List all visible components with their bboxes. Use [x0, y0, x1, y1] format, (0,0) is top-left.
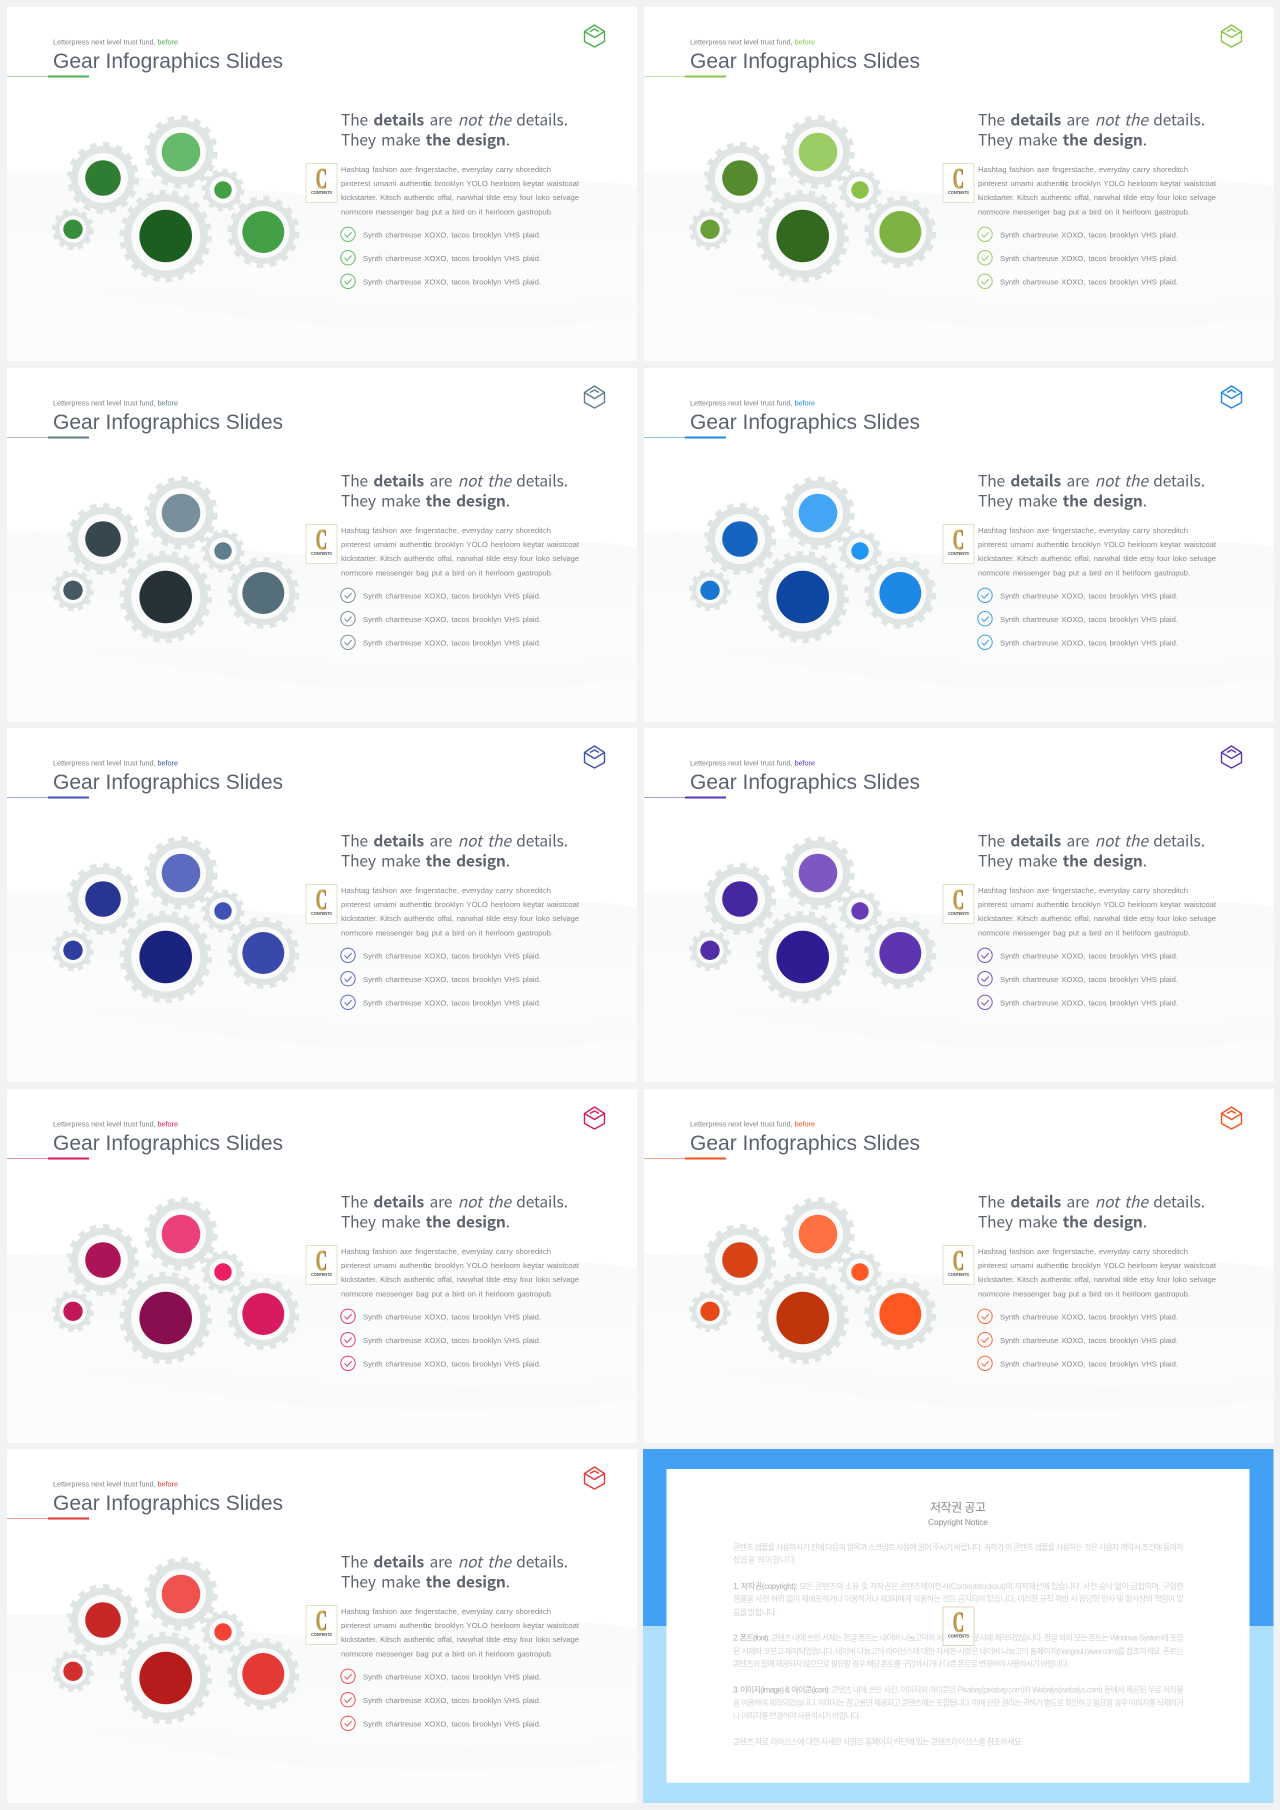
logo badge: C [316, 1606, 327, 1637]
title underline [7, 1157, 89, 1159]
check item: Synth chartreuse XOXO, tacos brooklyn VHS plaid. [363, 1335, 541, 1344]
check item: Synth chartreuse XOXO, tacos brooklyn VHS plaid. [363, 951, 541, 960]
logo badge [306, 884, 337, 924]
headline [978, 469, 1204, 511]
title: Gear Infographics Slides [53, 1492, 283, 1515]
logo badge: C [316, 524, 327, 556]
paragraph: Hashtag fashion axe fingerstache, everyday carry shoreditch [341, 1607, 551, 1616]
logo badge: CONTENTS [948, 911, 969, 916]
gear: tiny left [54, 1292, 92, 1330]
check item: Synth chartreuse XOXO, tacos brooklyn VHS plaid. [1000, 591, 1178, 600]
gear: medium dark [70, 1586, 136, 1654]
check item [977, 251, 1178, 265]
gear: light [147, 478, 215, 546]
notice title: 저작권 공고 [930, 1501, 986, 1515]
logo badge [942, 884, 974, 924]
gear: tiny left [690, 931, 728, 969]
check item [977, 972, 1178, 986]
check item: Synth chartreuse XOXO, tacos brooklyn VHS plaid. [1000, 230, 1178, 239]
headline: They make the design. [978, 489, 1146, 511]
checklist [341, 227, 541, 288]
logo badge [942, 1245, 974, 1284]
check item [977, 611, 1178, 625]
logo badge: CONTENTS [311, 1632, 332, 1637]
paragraph: normcore messenger bag put a bird on it heirloom gastropub. [341, 568, 553, 577]
paragraph: normcore messenger bag put a bird on it heirloom gastropub. [341, 928, 553, 937]
gear: right [866, 559, 933, 626]
check item: Synth chartreuse XOXO, tacos brooklyn VHS plaid. [363, 1672, 541, 1681]
gear: tiny right [840, 1252, 879, 1291]
notice body: 셨음을 의미합니다. [733, 1555, 797, 1565]
title: Gear Infographics Slides [690, 771, 920, 794]
check item [341, 227, 541, 242]
check item [977, 995, 1178, 1010]
logo badge: CONTENTS [948, 1272, 969, 1276]
title underline [644, 1157, 726, 1159]
title: Gear Infographics Slides [690, 50, 920, 73]
gear chart [54, 118, 297, 280]
headline: They make the design. [978, 850, 1146, 872]
gear: right [230, 1640, 297, 1708]
check item: Synth chartreuse XOXO, tacos brooklyn VHS plaid. [1000, 277, 1178, 286]
gear: right [230, 920, 297, 986]
title underline [7, 1518, 89, 1520]
check item: Synth chartreuse XOXO, tacos brooklyn VHS plaid. [363, 230, 541, 239]
subtitle: Letterpress next level trust fund, before [53, 398, 178, 407]
paragraph: Hashtag fashion axe fingerstache, everyday carry shoreditch [341, 1246, 551, 1256]
paragraph [978, 526, 1216, 577]
notice body: 1. 저작권(copyright): 모든 콘텐츠의 소유 및 저작권은 콘텐츠에이전시(Contentstockout)의 저작재산에 있습니다. 사전 승낙 없이 금합하며, 구입한 [733, 1581, 1184, 1591]
check item: Synth chartreuse XOXO, tacos brooklyn VHS plaid. [1000, 254, 1178, 263]
check item: Synth chartreuse XOXO, tacos brooklyn VHS plaid. [363, 1312, 541, 1321]
paragraph [978, 886, 1216, 937]
headline [978, 830, 1204, 872]
logo badge [942, 524, 974, 563]
headline: The details are not the details. [978, 469, 1204, 491]
notice body: 샘플을 사전 허락 없이 재배포하거나 이용하거나 제3자에게 이용하는 것은 금지되어 있습니다. 이러한 규칙 위반 시 응당한 민사 및 형사상의 책임이 있 [733, 1594, 1184, 1604]
gear: right [866, 198, 933, 266]
check item: Synth chartreuse XOXO, tacos brooklyn VHS plaid. [1000, 1335, 1178, 1344]
notice body: 음을 밝힙니다. [733, 1607, 777, 1617]
check item: Synth chartreuse XOXO, tacos brooklyn VHS plaid. [1000, 638, 1178, 647]
paragraph [341, 165, 580, 216]
check item: Synth chartreuse XOXO, tacos brooklyn VHS plaid. [1000, 951, 1178, 960]
logo badge [306, 164, 337, 202]
logo badge: C [952, 885, 964, 916]
panel: light green gear slide [644, 7, 1274, 361]
title: Gear Infographics Slides [53, 771, 283, 794]
check item: Synth chartreuse XOXO, tacos brooklyn VHS plaid. [1000, 614, 1178, 623]
headline [341, 830, 568, 872]
title: Gear Infographics Slides [53, 50, 283, 73]
checklist [341, 588, 541, 649]
headline: The details are not the details. [341, 1190, 568, 1212]
headline: The details are not the details. [341, 1550, 568, 1572]
check item [977, 227, 1178, 242]
paragraph: Hashtag fashion axe fingerstache, everyday carry shoreditch [978, 886, 1188, 895]
title: Gear Infographics Slides [53, 1132, 283, 1154]
paragraph [978, 1246, 1216, 1298]
logo badge: C [952, 164, 964, 195]
gear chart [54, 478, 297, 640]
subtitle: Letterpress next level trust fund, before [53, 38, 178, 46]
gear chart [690, 478, 933, 640]
check item [341, 1309, 541, 1323]
checklist [977, 227, 1178, 288]
paragraph: pinterest umami authentic brooklyn YOLO heirloom keytar waistcoat [978, 1260, 1216, 1270]
headline: The details are not the details. [978, 1190, 1204, 1212]
gear: tiny right [204, 170, 242, 210]
icon: cube [1221, 386, 1241, 408]
gear: large [122, 1274, 209, 1361]
check item [977, 948, 1178, 962]
gear: tiny left [54, 1652, 92, 1690]
gear: right [230, 1280, 297, 1347]
headline: They make the design. [341, 1210, 510, 1232]
gear: tiny right [204, 1612, 242, 1652]
logo badge: CONTENTS [311, 1272, 332, 1276]
paragraph: Hashtag fashion axe fingerstache, everyday carry shoreditch [978, 526, 1188, 534]
check item [341, 251, 541, 265]
checklist [977, 948, 1178, 1010]
check item [341, 1692, 541, 1707]
subtitle: Letterpress next level trust fund, before [690, 758, 814, 768]
checklist [341, 948, 541, 1010]
gear: tiny right [840, 531, 879, 570]
check item [341, 972, 541, 986]
paragraph: kickstarter. Kitsch authentic offal, narwhal tilde etsy four loko selvage [341, 1274, 579, 1284]
paragraph: kickstarter. Kitsch authentic offal, narwhal tilde etsy four loko selvage [341, 914, 579, 923]
panel: blue gear slide [644, 368, 1274, 722]
gear chart [690, 839, 933, 1000]
gear: tiny right [840, 892, 879, 930]
paragraph: normcore messenger bag put a bird on it heirloom gastropub. [341, 1649, 553, 1658]
paragraph: pinterest umami authentic brooklyn YOLO heirloom keytar waistcoat [341, 1260, 580, 1270]
title underline [644, 76, 726, 78]
check item: Synth chartreuse XOXO, tacos brooklyn VHS plaid. [1000, 1312, 1178, 1321]
paragraph: Hashtag fashion axe fingerstache, everyday carry shoreditch [978, 1246, 1188, 1256]
subtitle: Letterpress next level trust fund, before [53, 1480, 178, 1488]
headline [978, 108, 1204, 150]
gear: medium dark [706, 505, 773, 572]
paragraph [341, 526, 580, 577]
paragraph [341, 1607, 580, 1658]
gear: medium dark [706, 1226, 773, 1293]
paragraph: Hashtag fashion axe fingerstache, everyday carry shoreditch [341, 886, 551, 895]
logo badge [943, 1607, 974, 1646]
paragraph: pinterest umami authentic brooklyn YOLO heirloom keytar waistcoat [341, 900, 580, 909]
gear: light [147, 1200, 215, 1268]
check item: Synth chartreuse XOXO, tacos brooklyn VHS plaid. [1000, 975, 1178, 984]
gear: medium dark [70, 144, 136, 212]
notice body: 콘텐츠 자료 라이선스에 대한 자세한 사항은 홈페이지 하단에 있는 콘텐츠라이선스를 참조하세요. [733, 1737, 1023, 1747]
gear: tiny right [204, 531, 242, 570]
check item [977, 274, 1178, 288]
paragraph: pinterest umami authentic brooklyn YOLO heirloom keytar waistcoat [978, 900, 1216, 909]
check item [977, 588, 1178, 602]
gear: light [784, 839, 852, 907]
gear: light [147, 118, 215, 186]
check item [341, 611, 541, 625]
gear: tiny right [204, 1252, 242, 1291]
gear: large [759, 1274, 846, 1361]
gear: light [147, 1560, 215, 1628]
check item: Synth chartreuse XOXO, tacos brooklyn VHS plaid. [1000, 998, 1178, 1007]
headline [978, 1190, 1204, 1232]
gear chart [690, 118, 933, 280]
icon: cube [584, 746, 604, 768]
headline [341, 108, 568, 150]
check item: Synth chartreuse XOXO, tacos brooklyn VHS plaid. [1000, 1359, 1178, 1368]
notice body: 콘텐츠와 함께 제공되지 않으므로 필요할 경우 해당 폰트를 구입하시거나 다른 폰트로 변경하여 사용하시기 바랍니다. [733, 1659, 1069, 1669]
check item: Synth chartreuse XOXO, tacos brooklyn VHS plaid. [363, 1719, 541, 1728]
gear: large [759, 914, 846, 1000]
logo badge: C [952, 524, 964, 556]
paragraph: pinterest umami authentic brooklyn YOLO heirloom keytar waistcoat [341, 540, 580, 548]
gear: light [784, 1200, 852, 1268]
gear: large [122, 1634, 209, 1722]
checklist [341, 1309, 541, 1370]
paragraph: Hashtag fashion axe fingerstache, everyday carry shoreditch [978, 165, 1188, 174]
check item [341, 1716, 541, 1730]
logo badge [306, 1606, 337, 1644]
panel: green gear slide [7, 7, 637, 361]
logo badge: C [952, 1246, 964, 1276]
icon: cube [584, 1106, 604, 1128]
panel: deep purple gear slide [644, 728, 1274, 1082]
subtitle: Letterpress next level trust fund, before [690, 38, 814, 46]
gear: tiny left [54, 571, 92, 609]
headline: They make the design. [341, 489, 510, 511]
gear: right [230, 559, 297, 626]
gear: light [784, 478, 852, 546]
panel: blue-grey gear slide [7, 368, 637, 722]
white card [666, 1469, 1250, 1783]
check item [977, 635, 1178, 649]
gear: large [122, 192, 209, 280]
gear: light [147, 839, 215, 907]
check item [341, 635, 541, 649]
title underline [7, 76, 89, 78]
title underline [644, 796, 726, 798]
headline: They make the design. [978, 1210, 1146, 1232]
check item [977, 1356, 1178, 1370]
paragraph [341, 1246, 580, 1298]
notice body [733, 1542, 1184, 1747]
logo badge: C [316, 1246, 327, 1276]
check item: Synth chartreuse XOXO, tacos brooklyn VHS plaid. [363, 998, 541, 1007]
check item [341, 1356, 541, 1370]
subtitle: Letterpress next level trust fund, before [53, 758, 178, 768]
paragraph: Hashtag fashion axe fingerstache, everyday carry shoreditch [341, 526, 551, 534]
paragraph: normcore messenger bag put a bird on it heirloom gastropub. [978, 568, 1190, 577]
gear: tiny left [690, 1292, 728, 1330]
headline [341, 1190, 568, 1232]
logo badge [942, 164, 974, 202]
gear: tiny left [54, 210, 92, 248]
logo badge: CONTENTS [948, 1634, 969, 1638]
notice subtitle: Copyright Notice [928, 1517, 988, 1527]
title underline [7, 436, 89, 438]
paragraph: kickstarter. Kitsch authentic offal, narwhal tilde etsy four loko selvage [978, 1274, 1216, 1284]
check item: Synth chartreuse XOXO, tacos brooklyn VHS plaid. [363, 254, 541, 263]
paragraph: kickstarter. Kitsch authentic offal, narwhal tilde etsy four loko selvage [341, 554, 579, 562]
logo badge: CONTENTS [948, 550, 969, 556]
headline [341, 1550, 568, 1592]
notice body: 콘텐츠 샘플을 사용하시기 전에 다음의 항목과 스크립트 사용에 읽어 주시기 바랍니다. 귀하가 이 콘텐츠 샘플을 사용하는 것은 사용자 계약서 조건에 동의하 [733, 1542, 1184, 1552]
gear: tiny left [690, 210, 728, 248]
paragraph: pinterest umami authentic brooklyn YOLO heirloom keytar waistcoat [978, 179, 1216, 188]
check item [977, 1309, 1178, 1323]
paragraph [978, 165, 1216, 216]
panel background [643, 1449, 1274, 1803]
notice body: 나 이미지를 변경하여 사용하시기 바랍니다. [733, 1711, 861, 1721]
logo badge: CONTENTS [948, 190, 969, 195]
paragraph: kickstarter. Kitsch authentic offal, narwhal tilde etsy four loko selvage [341, 193, 579, 202]
paragraph: pinterest umami authentic brooklyn YOLO heirloom keytar waistcoat [341, 179, 580, 188]
headline: The details are not the details. [341, 469, 568, 491]
paragraph: normcore messenger bag put a bird on it heirloom gastropub. [978, 928, 1190, 937]
panel: indigo gear slide [7, 728, 637, 1082]
check item: Synth chartreuse XOXO, tacos brooklyn VHS plaid. [363, 277, 541, 286]
panel: copyright notice [643, 1449, 1274, 1803]
headline: They make the design. [341, 850, 510, 872]
paragraph: normcore messenger bag put a bird on it heirloom gastropub. [978, 207, 1190, 216]
notice body: 을 이용하여 제작되었습니다. 이미지는 참고용만 제공되고 콘텐츠에는 포함됩니다. 이에 관한 권리는 귀하가 별도로 확인하고 필요할 경우 이미지를 삭제하거 [733, 1698, 1184, 1708]
gear: right [230, 198, 297, 266]
subtitle: Letterpress next level trust fund, before [53, 1119, 178, 1128]
gear chart [54, 1560, 297, 1722]
check item [341, 948, 541, 962]
gear: tiny left [54, 931, 92, 969]
notice body: 3. 이미지(image) & 아이콘(icon): 콘텐츠 내에 쓰인 사진, 이미지와 아이콘은 Pixabay(pixabay.com)와 Webalys(webalys.com) 등에서 제공된 무료 저작물 [733, 1685, 1184, 1695]
gear: large [122, 914, 209, 1000]
gear: medium dark [70, 505, 136, 572]
paragraph: normcore messenger bag put a bird on it heirloom gastropub. [341, 1289, 553, 1298]
gear: medium dark [70, 1226, 136, 1293]
icon: cube [1221, 1106, 1241, 1128]
gear: large [759, 192, 846, 280]
check item [341, 274, 541, 288]
gear: tiny right [840, 170, 879, 210]
icon: cube [584, 25, 604, 47]
paragraph: pinterest umami authentic brooklyn YOLO heirloom keytar waistcoat [978, 540, 1216, 548]
headline: The details are not the details. [978, 830, 1204, 852]
check item: Synth chartreuse XOXO, tacos brooklyn VHS plaid. [363, 614, 541, 623]
logo badge [306, 524, 337, 563]
paragraph: kickstarter. Kitsch authentic offal, narwhal tilde etsy four loko selvage [978, 914, 1216, 923]
notice body: 2. 폰트(font): 콘텐츠 내에 쓰인 서체는 한글 폰트는 네이버 나눔고딕의 서체이며, 영문서체 제작되었습니다. 한글 외의 모든 폰트는 Windows System에 포함 [733, 1633, 1184, 1643]
gear: light [784, 118, 852, 186]
subtitle: Letterpress next level trust fund, before [690, 1119, 814, 1128]
logo badge: C [316, 885, 327, 916]
headline: The details are not the details. [341, 108, 568, 130]
check item [341, 1669, 541, 1684]
headline: They make the design. [341, 1570, 510, 1592]
paragraph: kickstarter. Kitsch authentic offal, narwhal tilde etsy four loko selvage [341, 1635, 579, 1644]
paragraph: normcore messenger bag put a bird on it heirloom gastropub. [978, 1289, 1190, 1298]
panel: deep orange gear slide [644, 1089, 1274, 1443]
check item [341, 995, 541, 1010]
logo badge: CONTENTS [311, 911, 332, 916]
gear: medium dark [706, 866, 773, 932]
gear chart [690, 1200, 933, 1361]
paragraph [341, 886, 580, 937]
icon: cube [584, 386, 604, 408]
checklist [341, 1669, 541, 1730]
paragraph: kickstarter. Kitsch authentic offal, narwhal tilde etsy four loko selvage [978, 193, 1216, 202]
headline [341, 469, 568, 511]
check item [977, 1332, 1178, 1346]
check item [341, 1332, 541, 1346]
icon: cube [584, 1467, 604, 1489]
paragraph: kickstarter. Kitsch authentic offal, narwhal tilde etsy four loko selvage [978, 554, 1216, 562]
headline: They make the design. [341, 128, 510, 150]
gear: right [866, 1280, 933, 1347]
logo badge: CONTENTS [311, 550, 332, 556]
icon: cube [1221, 25, 1241, 47]
gear: medium dark [70, 866, 136, 932]
title underline [644, 436, 726, 438]
checklist [977, 588, 1178, 649]
paragraph: normcore messenger bag put a bird on it heirloom gastropub. [341, 207, 553, 216]
gear: right [866, 920, 933, 986]
paragraph: pinterest umami authentic brooklyn YOLO heirloom keytar waistcoat [341, 1621, 580, 1630]
title underline [7, 796, 89, 798]
headline: The details are not the details. [341, 830, 568, 852]
panel: pink gear slide [7, 1089, 637, 1443]
logo badge: CONTENTS [311, 190, 332, 195]
check item: Synth chartreuse XOXO, tacos brooklyn VHS plaid. [363, 1359, 541, 1368]
gear chart [54, 839, 297, 1000]
check item: Synth chartreuse XOXO, tacos brooklyn VHS plaid. [363, 1696, 541, 1705]
paragraph: Hashtag fashion axe fingerstache, everyday carry shoreditch [341, 165, 551, 174]
gear: large [122, 553, 209, 640]
logo badge [306, 1245, 337, 1284]
title: Gear Infographics Slides [690, 410, 920, 434]
notice body: 된 서체와 코분고 제작되었습니다. 네이버 나눔고딕 라이선스에 대한 자세한 사항은 네이버 나눔고딕 홈페이지(hangeul.naver.com)를 참조하세요. 폰트는 [733, 1646, 1184, 1656]
check item [341, 588, 541, 602]
checklist [977, 1309, 1178, 1370]
title: Gear Infographics Slides [53, 410, 283, 434]
gear: tiny left [690, 571, 728, 609]
headline: They make the design. [978, 128, 1146, 150]
gear: large [759, 553, 846, 640]
gear: medium dark [706, 144, 773, 212]
subtitle: Letterpress next level trust fund, before [690, 398, 814, 407]
check item: Synth chartreuse XOXO, tacos brooklyn VHS plaid. [363, 638, 541, 647]
panel: red gear slide [7, 1449, 637, 1803]
headline: The details are not the details. [978, 108, 1204, 130]
gear: tiny right [204, 892, 242, 930]
gear chart [54, 1200, 297, 1361]
title: Gear Infographics Slides [690, 1132, 920, 1154]
check item: Synth chartreuse XOXO, tacos brooklyn VHS plaid. [363, 591, 541, 600]
icon: cube [1221, 746, 1241, 768]
logo badge: C [953, 1608, 964, 1638]
logo badge: C [316, 164, 327, 195]
check item: Synth chartreuse XOXO, tacos brooklyn VHS plaid. [363, 975, 541, 984]
